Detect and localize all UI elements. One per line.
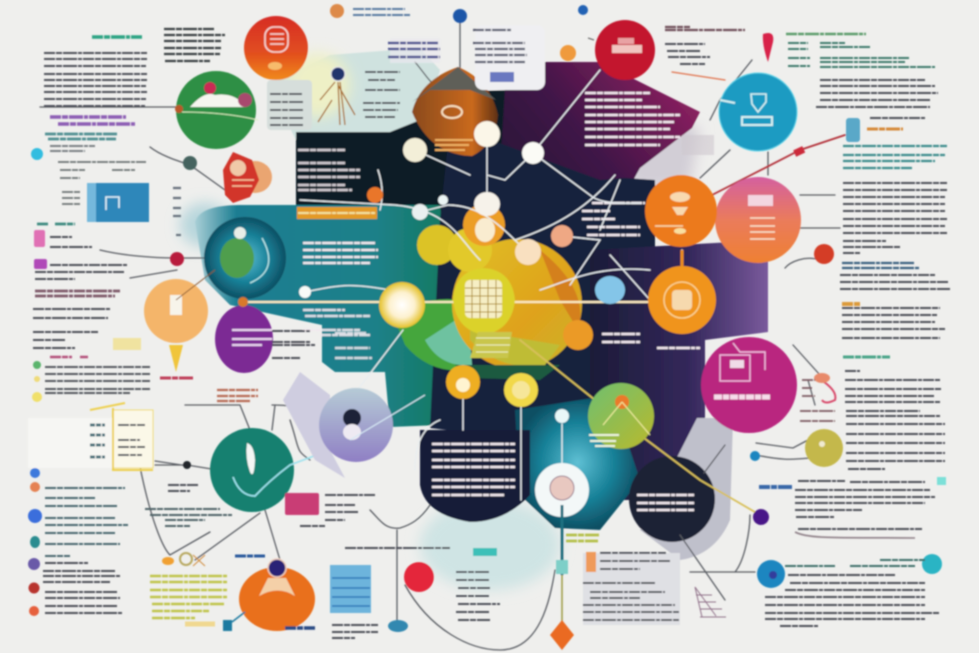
text block: cyan note: [50, 146, 95, 151]
small node: red squiggle top: [763, 33, 773, 62]
label: teal tag: [473, 548, 497, 556]
text block: top right column: [788, 43, 935, 67]
text block: blue heading lower: [759, 485, 792, 489]
text block: green heading lower right: [843, 356, 890, 358]
text block: upper left paragraph: [44, 53, 147, 106]
node: red-orange top circle: [244, 16, 308, 80]
bullets: green and yellow: [32, 361, 42, 402]
small icon: top orange: [330, 4, 344, 18]
panel: white card top: [473, 25, 545, 90]
small node: figure with legs: [318, 67, 355, 125]
node: brown-orange top circle: [412, 67, 498, 156]
text block: purple and pink bullets: [35, 237, 128, 279]
connector: red curved note: [795, 532, 915, 538]
small node: crimson ball: [170, 252, 184, 266]
text block: bottom right paragraph: [765, 575, 940, 626]
text block: right lower paragraph: [842, 308, 945, 338]
icon: small crimson bar: [285, 493, 319, 515]
small node: blue clamp: [750, 451, 760, 461]
text block: top column: [164, 29, 225, 61]
text block: lower heading: [798, 481, 925, 482]
text block: small top label: [665, 27, 745, 30]
text block: teal heading: [45, 134, 118, 139]
node: white glowing lower circle with pill: [535, 463, 589, 650]
text block: small labels bottom: [285, 626, 315, 630]
icon: blue document: [330, 565, 371, 613]
panel: pale blue-green backdrop behind top left nodes: [268, 48, 440, 140]
node: blue circle: [719, 73, 797, 151]
text block: lower right main: [845, 371, 945, 469]
panel: grey-lilac strip lower right: [640, 418, 733, 560]
icon: cyan tag: [937, 477, 946, 485]
small node: dark joint: [183, 461, 191, 469]
bullets: left column circles: [28, 468, 42, 616]
text block: small blue heading: [235, 554, 265, 558]
text block: bullet column 1: [45, 488, 128, 556]
text block: left heading red: [35, 291, 120, 296]
text block: right margin labels: [800, 380, 835, 421]
icon: hatched note: [695, 587, 726, 617]
panel: teal left-centre field: [195, 205, 455, 427]
small node: blue ring: [757, 560, 785, 588]
node: lavender circle: [283, 372, 425, 478]
text block: shield: [432, 444, 515, 495]
panel: black upper-centre field: [296, 90, 560, 300]
text block: yellow lined paragraph: [150, 576, 228, 624]
panel: lilac small card top: [388, 38, 440, 63]
text block: navy circle: [637, 495, 695, 510]
small node: blue badge: [846, 118, 860, 142]
icon: blue book card: [87, 183, 149, 222]
text block: right orange label: [842, 302, 860, 306]
heading: upper-centre dark text block: [297, 150, 378, 263]
text block: upper left headline: [92, 35, 142, 39]
node: purple circle: [215, 305, 273, 373]
text block: purple neighbour: [272, 331, 315, 358]
text block: lower paragraph: [795, 490, 935, 529]
text block: top right paragraph: [816, 80, 938, 107]
text block: left labels row: [37, 223, 75, 225]
text block: purple panel: [585, 93, 714, 155]
text block: left middle lines: [58, 162, 146, 204]
panel: navy shield with text: [420, 430, 530, 522]
text block: teal paragraph: [843, 146, 947, 168]
small node: purple right: [753, 509, 769, 525]
small node: red bar: [793, 146, 805, 157]
node: teal-blue globe circle: [204, 217, 286, 299]
connector: red to blue-side line: [712, 135, 845, 195]
panel: teal-grey card: [267, 80, 312, 130]
node: red hexagon with lines: [223, 152, 272, 203]
text block: top right heading: [786, 33, 866, 35]
connectors: dark lines: [40, 20, 840, 650]
text block: right middle paragraph: [843, 183, 947, 233]
text block: bottom centre: [332, 625, 378, 638]
small node: blue pin: [453, 9, 467, 23]
node: orange circle upper: [645, 175, 717, 247]
small node: blue top: [578, 5, 588, 15]
text block: yellow sticky: [113, 338, 141, 350]
small node: dark ball left: [183, 156, 197, 170]
node: yellow-green circle: [588, 383, 654, 449]
small nodes: glowing white and orange: [238, 121, 625, 423]
text block: teal mid: [303, 310, 370, 335]
connector: orange line to blue node: [672, 72, 725, 80]
text block: small label: [168, 485, 198, 491]
small node: cyan blob: [922, 554, 942, 574]
icon: pink rectangle: [34, 230, 45, 247]
text block: dark label: [870, 117, 925, 119]
small node: orange top: [560, 45, 576, 61]
text block: navy right-centre: [582, 203, 645, 235]
text block: orange label: [867, 128, 903, 130]
label: green note yellow: [566, 535, 600, 541]
small node: red apple: [814, 244, 834, 264]
panel: purple upper-right field: [500, 62, 700, 300]
node: central grid hub: [453, 268, 515, 358]
label: blue pill: [388, 620, 408, 632]
text block: right of crimson: [300, 495, 450, 548]
text block: lilac heading: [50, 117, 135, 124]
panel: yellow note card: [28, 403, 153, 470]
panel: pale washes around the centre: [180, 53, 700, 590]
icon: purple rectangle: [34, 259, 47, 269]
text block: left paragraph: [33, 309, 110, 348]
node: peach circle with figure: [144, 270, 215, 372]
panel: teal glow lower centre: [515, 395, 640, 530]
node: green circle: [175, 71, 258, 149]
connectors: network lines: [240, 70, 682, 500]
small node: cyan left dot: [31, 148, 43, 160]
text block: right of red circle: [456, 572, 500, 620]
text block: right blue heading: [842, 263, 920, 268]
panel: dark navy centre field: [430, 125, 655, 440]
text block: navy lower centre: [602, 334, 700, 348]
text block: teal lower: [335, 333, 372, 358]
small node: pink hook: [818, 378, 835, 402]
node: magenta circle: [701, 337, 797, 433]
text block: orange label: [217, 390, 258, 401]
node: orange circle lower: [648, 250, 716, 334]
text block: pink label: [160, 376, 193, 380]
panel: grey text card: [583, 552, 680, 625]
text block: right short lines: [843, 241, 900, 253]
text block: bottom heading: [785, 560, 925, 566]
panel: navy circle lower right: [629, 456, 715, 542]
text block: bullet column 2: [43, 563, 123, 613]
node: teal-green circle: [210, 428, 370, 512]
small node: salmon knot: [814, 373, 830, 383]
node: central yellow flower: [395, 204, 582, 380]
connector: diagonal to purple node: [520, 340, 760, 515]
icon: red small circle bottom: [404, 562, 434, 592]
node: pink-orange circle: [715, 177, 801, 263]
text block: centre lower paragraph: [145, 509, 232, 526]
small node: olive donut: [805, 429, 843, 467]
text block: bullet paragraph: [45, 367, 150, 393]
text block: under top label: [665, 44, 710, 64]
panel: navy right of centre: [590, 240, 768, 500]
text block: narrow column: [173, 188, 181, 235]
text block: heading pink: [50, 356, 88, 358]
node: red top circle: [588, 20, 655, 80]
node: orange bottom circle: [223, 559, 315, 631]
text block: right lower: [840, 275, 950, 289]
panel: green-tinted note card: [363, 72, 400, 117]
text block: top heading lilac: [353, 9, 410, 15]
icon: orange and olive tags: [162, 553, 205, 566]
